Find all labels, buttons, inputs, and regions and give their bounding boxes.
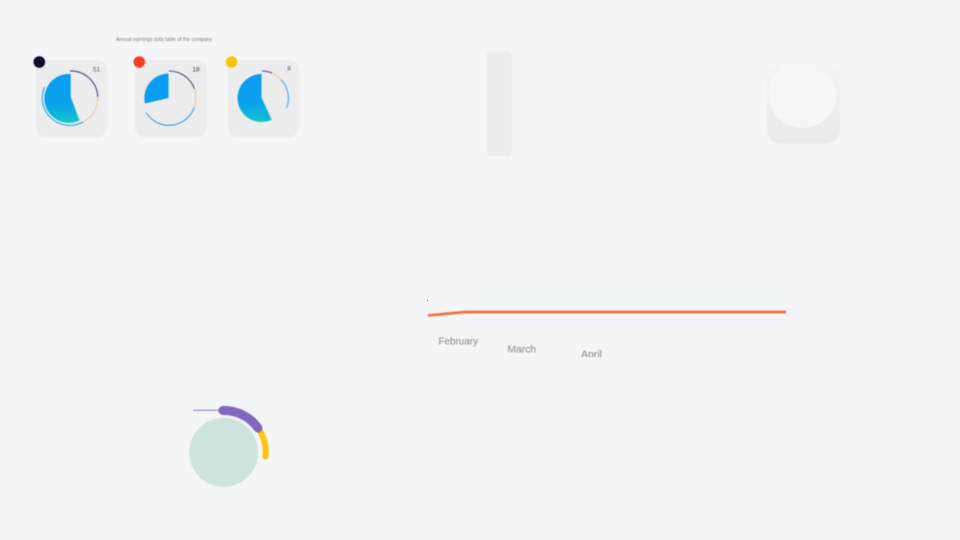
gauge inner circle [189,418,258,487]
gauge yellow arc [258,428,266,456]
orange line chart [428,312,786,316]
faded card background [767,60,840,144]
gauge pointer line [193,409,224,411]
panel: card 3 [226,56,299,137]
card 3 background [228,60,299,137]
faded circle [769,61,836,128]
gauge purple arc [223,410,258,428]
card 3 ring [262,71,288,108]
card 2 marker dot [134,56,145,68]
label: April: April [581,350,602,360]
card 3 marker dot [226,56,237,68]
card 1 pie wedge [44,74,80,123]
month labels [438,336,602,358]
panel: card 2 [134,56,207,137]
card 2 background [135,60,207,137]
panel: card 1 [34,56,107,137]
card 3 pie wedge [238,74,272,122]
card 2 value: 18 [192,66,200,74]
panel: faded card with circle [767,60,840,144]
card 2 pie wedge [144,74,168,104]
faded vertical bar [487,51,512,156]
label: March: March [508,344,536,356]
card 1 background [36,60,107,137]
title: Annual earnings data table of the company [116,37,212,43]
card 2 ring [146,71,196,125]
card 1 ring [42,71,98,125]
small chart tick [427,300,428,301]
card 1 marker dot [34,56,45,68]
card 1 value: 51 [93,66,100,74]
infographic canvas [32,36,840,487]
label: February: February [438,336,478,348]
card 3 value: 8 [287,66,291,72]
panel: circular gauge [189,410,266,487]
